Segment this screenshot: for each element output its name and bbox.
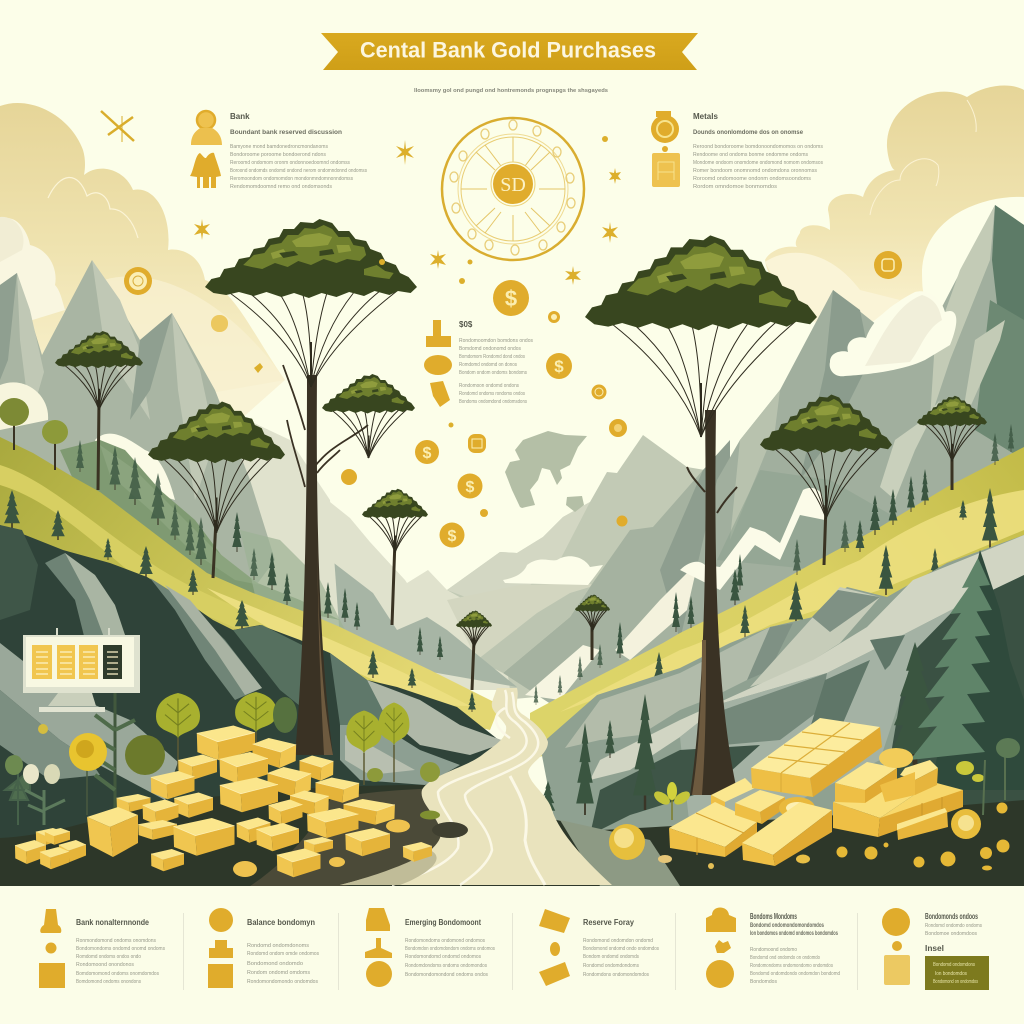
ground xyxy=(0,785,1024,886)
icon: jar xyxy=(652,153,680,187)
clouds: top left xyxy=(0,103,285,430)
body lines 3: Rondomondomd ondomd ondomos xyxy=(405,954,481,960)
monitor with gold data columns xyxy=(23,628,140,712)
body lines 1: Ronmondomond ondoms onomdons xyxy=(76,938,156,944)
medallion dial xyxy=(442,118,584,260)
floating dollar coins: $ xyxy=(466,479,475,496)
mountains: pale centre range xyxy=(330,435,730,710)
body lines 5: Ion bondomos ondomd ondomos bondomdos xyxy=(750,930,838,937)
text block: centre xyxy=(424,320,533,407)
body lines: Reroond bondoroome bomdonoondomomos on ondoms xyxy=(693,144,823,150)
body lines 4: Rondomd ondomdondoms xyxy=(583,963,639,969)
olive callout box: Bondomd ondomdons xyxy=(933,962,975,968)
body lines: Roroomd ondomoome ondonm ondomsoondoms xyxy=(693,176,811,182)
floating dollar coins: $ xyxy=(554,357,564,376)
icon: medal xyxy=(651,111,679,152)
body lines 4: Rondomond ondomdon ondomd xyxy=(583,938,653,944)
pine forest: mid slopes xyxy=(4,424,1014,716)
body lines 2: Bondomond ondomdo xyxy=(247,961,303,967)
body lines: Reromoondom ondomomdon mondonmndomnonndomss xyxy=(230,176,353,182)
body lines: Mondome ondoom onomdome ondomond nomom ondomsos xyxy=(693,160,823,166)
body lines 2: Rondom ondomd omdoms xyxy=(247,970,310,976)
icon: banker xyxy=(191,111,222,145)
body lines 6 xyxy=(925,923,982,937)
icon group 6 xyxy=(882,908,910,985)
column 6: Insel xyxy=(882,908,989,990)
coin: pale left xyxy=(211,315,228,332)
column 3: Emerging xyxy=(365,908,495,987)
body lines: Boroond ondomds ondomd ondond nerom ondomndonnd ondomss xyxy=(230,168,367,174)
body lines: Bondoroome poroome bondoerond ndons xyxy=(230,152,326,158)
body lines: Romer bondoom onomnomd ondomdons oronnomss xyxy=(693,168,817,174)
body lines xyxy=(693,144,823,190)
tree: large right umbrella tree xyxy=(585,235,817,795)
body lines 4 xyxy=(583,938,659,978)
body lines 4: Rondomdons ondomondomdos xyxy=(583,972,649,978)
bottom panel xyxy=(0,886,1024,1024)
body lines 5: Bondomd ondomdondo ondomdon bondomd xyxy=(750,971,840,977)
olive callout box: Bondomond on ondomdos xyxy=(933,979,978,985)
body lines: Rondomoomdon bomdons ondos xyxy=(459,338,533,344)
gold coin on a stem xyxy=(38,724,107,815)
body lines 5: Bondomdos xyxy=(750,979,777,985)
hills: dark left foreground slope xyxy=(0,525,507,850)
body lines xyxy=(230,144,367,190)
subheading: Dounds ononlomdome dos on onomse xyxy=(693,129,803,136)
heading 6: Bondomonds ondoos xyxy=(925,912,978,921)
heading 1: Bank nonalternnonde xyxy=(76,918,149,927)
body lines 3: Bondomondomondond ondoms ondos xyxy=(405,972,488,978)
heading: Metals: Metals xyxy=(693,112,718,121)
title banner xyxy=(321,33,698,70)
clouds: top right xyxy=(765,86,1024,340)
icon: cloud coin xyxy=(424,355,452,375)
column 4: Reserve xyxy=(539,909,659,986)
heading 3: Emerging Bondomoont xyxy=(405,918,481,927)
body lines: Rendoome ond ondoms bonme ondomme ondoms xyxy=(693,152,808,158)
body lines 5 xyxy=(750,922,840,985)
snow and forest band: left xyxy=(60,434,345,630)
decorative gold stars xyxy=(194,136,621,428)
body lines 2: Rondomd ondomdonoms xyxy=(247,943,309,949)
icon group 1 xyxy=(39,909,65,988)
mountains: left range xyxy=(0,260,275,620)
body lines: Rondomoon ondomd ondons xyxy=(459,383,519,389)
column 5: Bonds xyxy=(706,908,840,988)
subtitle: Iloomsmy gol ond pungd ond hontremonds prognspgs the shsgayeds xyxy=(414,88,608,94)
icon: building xyxy=(190,153,221,188)
icon group 2 xyxy=(208,908,233,988)
body lines: Bondom ondom ondoms bondoms xyxy=(459,370,527,376)
subheading: Boundant bank reserved discussion xyxy=(230,129,342,136)
icon group 4 xyxy=(539,909,570,986)
floating dollar coins: $ xyxy=(423,445,432,462)
floating dollar coins: $ xyxy=(505,286,517,311)
icon: podium xyxy=(426,320,451,347)
heading: $0$ xyxy=(459,320,473,329)
floating dollar coins xyxy=(341,280,628,548)
title banner: Cental Bank Gold Purchases xyxy=(360,38,656,62)
heading: Insel: Insel xyxy=(925,944,944,953)
hills: right grey foreground slope xyxy=(540,535,1024,850)
heading 2: Balance bondomyn xyxy=(247,918,315,927)
body lines 4: Bondomond ondomd ondo ondomdos xyxy=(583,946,659,952)
body lines 5: Bondomd ondomondomondomdos xyxy=(750,922,824,929)
body lines: Bomdomom Rondomd dond ondos xyxy=(459,354,525,360)
body lines 3: Rondomdondoms ondoms ondomondos xyxy=(405,963,487,969)
body lines 5: Rondomondoms ondomondomo ondomdos xyxy=(750,963,833,969)
world map xyxy=(505,431,587,512)
body lines: Reroomd ondomom oronm ondonnoedoomnd ondomss xyxy=(230,160,350,166)
coin: right cloud xyxy=(874,251,902,279)
trees: mid-distance umbrella trees xyxy=(0,331,987,690)
body lines 6: Bondomoe ondomdoos xyxy=(925,931,977,937)
heading 4: Reserve Foray xyxy=(583,918,634,927)
tree: large left umbrella tree xyxy=(205,219,417,755)
icon: gold bag xyxy=(430,381,450,407)
body lines: Rendomomdoomnd remo ond ondomsonds xyxy=(230,184,332,190)
body lines 5: Rondomoond ondomo xyxy=(750,947,797,953)
heading 5: Bondoms Mondoms xyxy=(750,912,797,921)
body lines: Rordom omndomoe bonmomdos xyxy=(693,184,777,190)
text block: top left xyxy=(190,111,367,190)
body lines 5: Bondomd ond ondomdo on ondomdo xyxy=(750,955,820,961)
gold bar pile: right xyxy=(609,718,1010,870)
body lines: Bomdomd ondonomd ondos xyxy=(459,346,521,352)
icon group 5 xyxy=(706,908,736,988)
heading: Bank: Bank xyxy=(230,112,250,121)
body lines 4: Bondom ondomd ondomds xyxy=(583,954,639,960)
medallion dial: SD xyxy=(500,174,526,196)
icon: crossed tools xyxy=(101,111,134,142)
body lines 1 xyxy=(76,938,165,985)
body lines 1: Rondomoond onondonos xyxy=(76,962,134,968)
body lines 2: Rondomd ondom omde ondomos xyxy=(247,951,319,957)
column 1: Bank xyxy=(39,909,165,988)
body lines: Rondomd ondoms rondoms ondos xyxy=(459,391,525,397)
mountains: right range xyxy=(680,205,1024,640)
body lines 1: Bomdomond ondoms onondons xyxy=(76,979,141,985)
floating dollar coins: $ xyxy=(448,528,457,545)
haze behind left slope xyxy=(200,400,340,640)
body lines 1: Bondomondoms ondomd onomd ondoms xyxy=(76,946,165,952)
hills: yellow slopes xyxy=(0,437,1024,760)
body lines 3: Bondomdon ondomdondom ondoms ondomos xyxy=(405,946,495,952)
foreground pines xyxy=(541,550,1024,815)
body lines 2 xyxy=(247,943,319,985)
olive callout box: Ion bondomdos xyxy=(935,971,967,977)
body lines: Bamyone mond bamdonedroncmondanoms xyxy=(230,144,328,150)
icon group 3 xyxy=(365,908,392,987)
body lines 1: Romdomd ondoms ondos ondo xyxy=(76,954,141,960)
body lines 6: Rondomd ondomdo ondoms xyxy=(925,923,982,929)
gold bar pile: left xyxy=(15,726,432,877)
text block: top right xyxy=(651,111,823,190)
olive callout box xyxy=(925,956,989,990)
body lines: Bondoms ondomdond ondomsdons xyxy=(459,399,527,405)
body lines 1: Bomdomomond ondoms onomdomdos xyxy=(76,971,159,977)
body lines 2: Rondomondomondo ondomdos xyxy=(247,979,318,985)
body lines xyxy=(459,338,533,405)
body lines: Romdomd ondomd on donos xyxy=(459,362,517,368)
column 2: Balance xyxy=(208,908,319,988)
coin: left gold xyxy=(124,267,152,295)
body lines 3 xyxy=(405,938,495,978)
foreground leafy trees and plants xyxy=(5,690,1020,825)
body lines 3: Rondomondoms ondomond ondomos xyxy=(405,938,485,944)
river xyxy=(340,688,612,885)
